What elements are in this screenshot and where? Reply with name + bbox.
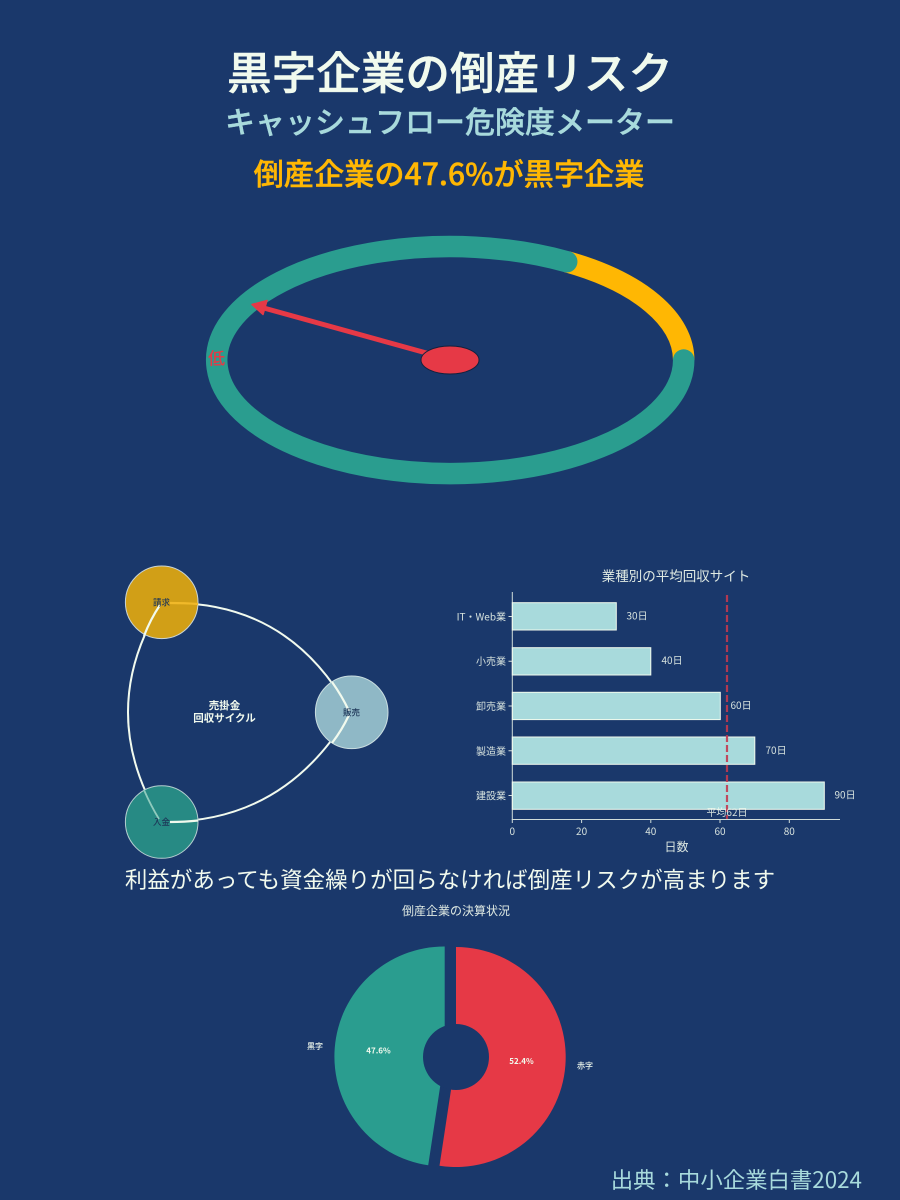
bar chart title: 業種別の平均回収サイト xyxy=(602,565,750,585)
node: billing xyxy=(125,566,198,639)
value labels xyxy=(626,608,856,802)
title: 黒字企業の倒産リスク xyxy=(227,37,673,102)
gauge yellow segment xyxy=(567,262,684,360)
node: sales: 販売 xyxy=(343,706,360,718)
percentage labels xyxy=(366,1046,534,1067)
bar chart: average collection days xyxy=(457,565,856,855)
average reference line xyxy=(726,595,728,819)
green wedge xyxy=(334,946,445,1165)
value labels: 70日 xyxy=(766,742,787,757)
red wedge xyxy=(440,947,566,1167)
category labels: 小売業 xyxy=(476,653,506,668)
headline statistic: 倒産企業の47.6%が黒字企業 xyxy=(254,150,644,194)
donut chart: financial status of bankrupt companies xyxy=(307,902,593,1167)
key message: 利益があっても資金繰りが回らなければ倒産リスクが高まります xyxy=(125,863,775,895)
node: sales xyxy=(315,676,388,749)
cycle diagram xyxy=(125,566,388,858)
node: billing: 請求 xyxy=(153,596,170,608)
category labels: 製造業 xyxy=(476,743,506,758)
value labels: 60日 xyxy=(730,697,752,712)
x axis tick labels: 0 xyxy=(510,823,516,838)
x axis tick labels: 40 xyxy=(645,823,657,838)
category labels: IT・Web業 xyxy=(457,608,506,624)
x axis tick labels: 80 xyxy=(784,823,795,838)
value labels: 40日 xyxy=(662,652,683,667)
outer labels xyxy=(307,1041,593,1072)
node: payment received xyxy=(125,786,198,858)
x axis tick labels: 60 xyxy=(714,823,726,838)
axes xyxy=(508,592,840,823)
category labels: 建設業 xyxy=(476,788,506,802)
x axis tick labels xyxy=(510,823,795,838)
cycle centre label: 売掛金 xyxy=(209,698,241,713)
gauge needle xyxy=(252,300,430,354)
subtitle: キャッシュフロー危険度メーター xyxy=(225,98,675,142)
donut hole xyxy=(423,1024,489,1090)
percentage labels: 52.4% xyxy=(509,1056,534,1067)
donut title: 倒産企業の決算状況 xyxy=(402,902,510,919)
value labels: 30日 xyxy=(626,608,648,622)
cycle centre label: 回収サイクル xyxy=(193,710,256,726)
percentage labels: 47.6% xyxy=(366,1046,391,1056)
category labels: 卸売業 xyxy=(476,698,506,713)
outer labels: 赤字 xyxy=(577,1060,593,1072)
value labels: 90日 xyxy=(834,786,856,802)
gauge meter xyxy=(208,247,684,474)
x axis tick labels: 20 xyxy=(576,823,588,838)
gauge low label: 低 xyxy=(208,344,225,370)
source: 出典：中小企業白書2024 xyxy=(611,1163,862,1195)
x axis title: 日数 xyxy=(664,838,689,855)
gauge hub xyxy=(421,346,479,374)
gauge green segment xyxy=(217,247,684,474)
cycle centre label xyxy=(193,698,256,726)
cycle arrows behind nodes xyxy=(128,603,348,822)
outer labels: 黒字 xyxy=(307,1041,323,1052)
bars xyxy=(512,603,824,809)
node: payment received: 入金 xyxy=(153,816,170,828)
average label: 平均62日 xyxy=(706,804,748,819)
category labels xyxy=(457,608,506,802)
